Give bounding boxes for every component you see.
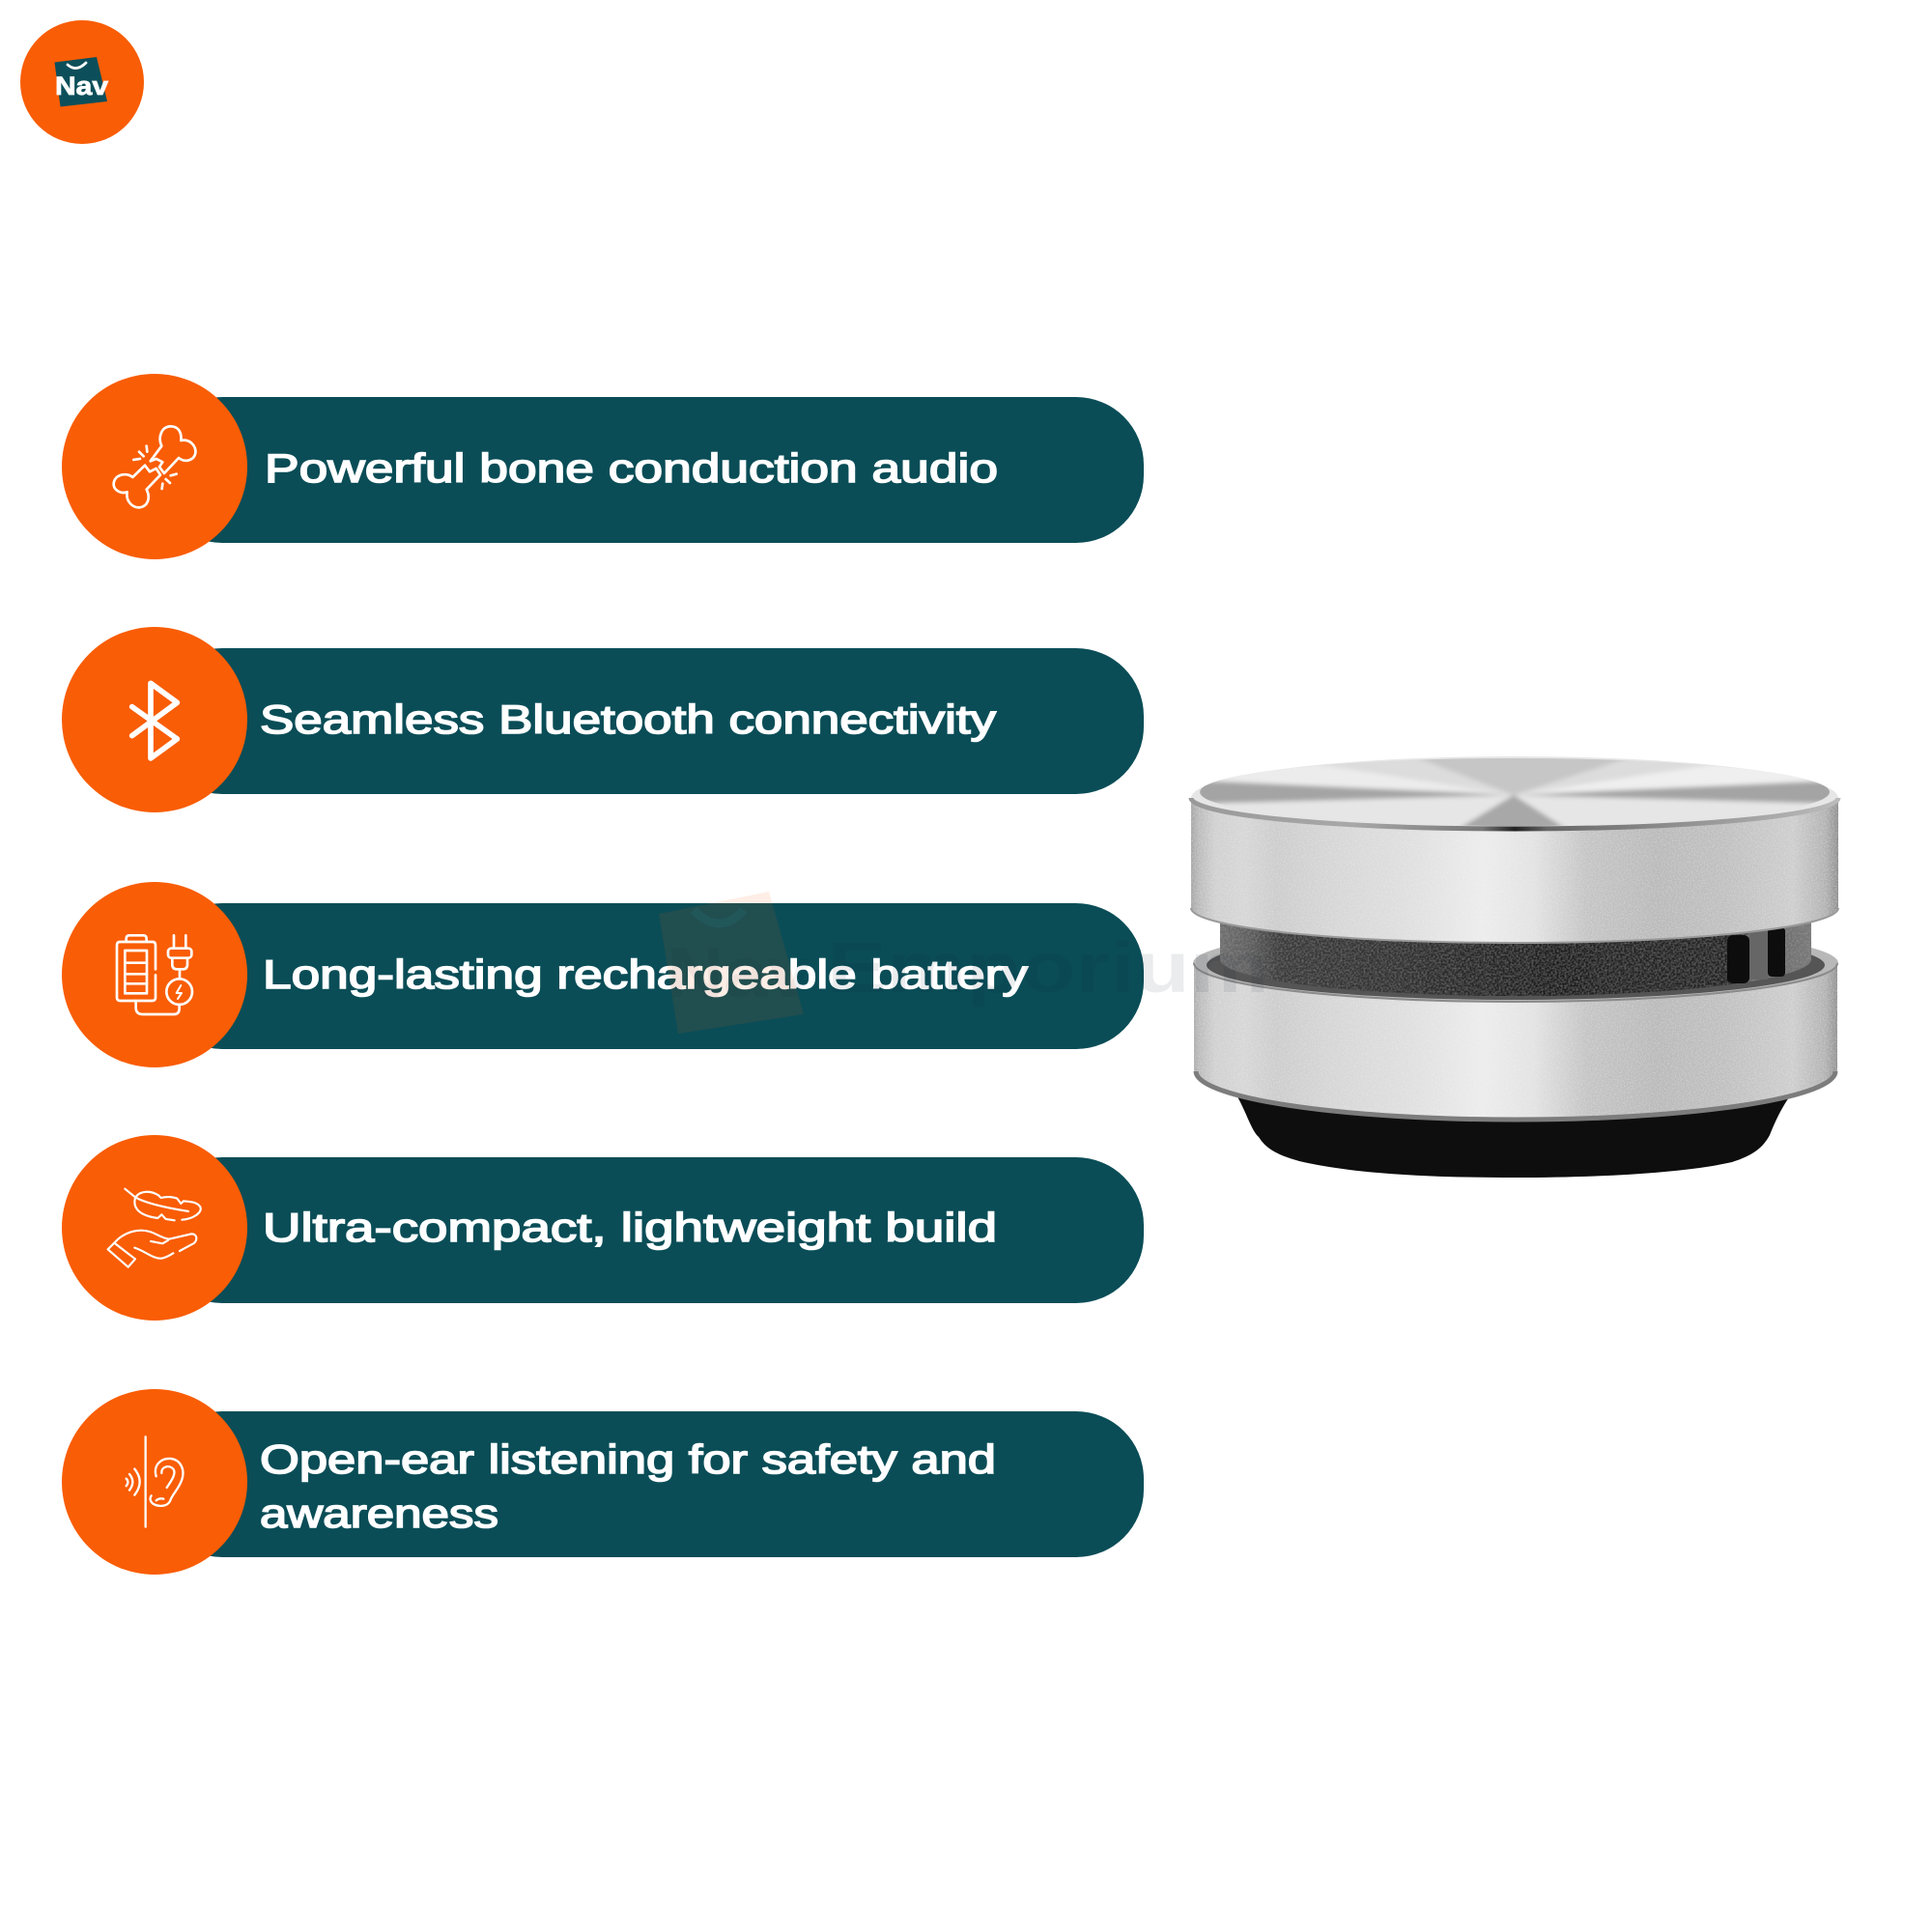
- logo wordmark: Nav: [55, 71, 108, 100]
- speaker vent slots: [1727, 927, 1785, 983]
- speaker upper cylinder: [1191, 798, 1838, 943]
- feature bar 2: bluetooth: [62, 627, 1144, 812]
- icon circle 5: [62, 1389, 247, 1575]
- icon: broken bone: [114, 426, 195, 507]
- icon circle 2: [62, 627, 247, 812]
- icon circle 4: [62, 1135, 247, 1321]
- speaker lower ring back: [1193, 924, 1838, 1002]
- speaker dark band: [1220, 918, 1811, 996]
- logo smile: [68, 63, 86, 69]
- product: bone conduction speaker: [1188, 744, 1845, 1178]
- speaker lower cylinder: [1194, 963, 1837, 1118]
- watermark text Nav: Nav: [667, 932, 811, 1012]
- icon: battery and plug: [117, 935, 192, 1014]
- feature text 2: Seamless Bluetooth connectivity: [260, 696, 996, 742]
- feature text 1: Powerful bone conduction audio: [265, 445, 998, 491]
- watermark bag: [659, 892, 804, 1034]
- icon: feather over hand: [108, 1189, 201, 1267]
- feature bar 3: battery: [62, 882, 1144, 1067]
- speaker top disc: [1200, 758, 1830, 826]
- feature text 4: Ultra-compact, lightweight build: [263, 1205, 997, 1250]
- logo bag shape: [54, 57, 107, 106]
- feature bar 1: bone conduction: [62, 374, 1144, 559]
- speaker black base: [1235, 1092, 1792, 1178]
- watermark: NavEmporium: [659, 892, 1269, 1034]
- feature bar 5: open ear: [62, 1389, 1144, 1575]
- watermark text Emporium: Emporium: [827, 927, 1269, 1008]
- feature text 5: Open-ear listening for safety and: [260, 1436, 996, 1482]
- feature bar 4: lightweight: [62, 1135, 1144, 1321]
- logo badge: [20, 20, 144, 144]
- icon: ear with sound waves: [127, 1436, 183, 1527]
- speaker top rim: [1191, 756, 1838, 829]
- icon circle 3: [62, 882, 247, 1067]
- icon circle 1: [62, 374, 247, 559]
- feature text 3: Long-lasting rechargeable battery: [263, 952, 1028, 997]
- feature text 5 second line: awareness: [260, 1491, 498, 1536]
- watermark smile: [694, 910, 744, 923]
- icon: bluetooth: [132, 683, 177, 758]
